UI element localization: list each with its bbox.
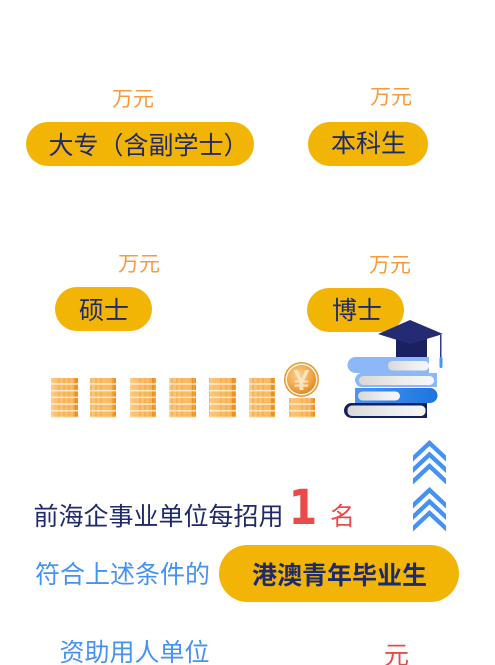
coin stack 4 (169, 378, 196, 418)
label: bachelor: 本科生 (331, 130, 406, 158)
text: recruitment condition: 前海企事业单位每招用 (34, 503, 284, 531)
bottom book (344, 403, 427, 418)
text: meets conditions: 符合上述条件的 (35, 561, 210, 589)
label: master: 硕士 (79, 297, 129, 325)
coin stack 1 (51, 378, 78, 418)
pill: master (55, 287, 152, 331)
unit: associate degree amount: 万元 (112, 88, 154, 111)
coin stack 7 short (289, 398, 315, 418)
pill: bachelor (308, 122, 428, 166)
coin stack 6 (249, 378, 275, 418)
coin stack 5 (209, 378, 236, 418)
icon: chevrons up (413, 440, 446, 532)
icon: yuan coin: ¥ (293, 365, 310, 397)
unit: bachelor amount: 万元 (370, 86, 412, 109)
label: hk macau graduates: 港澳青年毕业生 (252, 562, 427, 590)
number: one person: 1 (289, 480, 317, 536)
unit: master amount: 万元 (118, 253, 160, 276)
top book (348, 357, 429, 373)
pill: associate degree (26, 122, 254, 166)
icon: yuan coin (284, 362, 319, 397)
coin stack 2 (90, 378, 116, 418)
coin stack 3 (130, 378, 156, 418)
second book (355, 373, 437, 387)
unit: person: 名 (330, 503, 355, 531)
label: doctorate: 博士 (332, 297, 382, 325)
icon: books and graduation cap (344, 320, 443, 418)
pill: hk macau graduates (219, 545, 459, 602)
unit: doctorate amount: 万元 (369, 254, 411, 277)
third book (355, 388, 438, 403)
pill: doctorate (307, 288, 404, 332)
label: associate degree: 大专（含副学士） (48, 132, 249, 160)
graduation cap (378, 320, 443, 368)
